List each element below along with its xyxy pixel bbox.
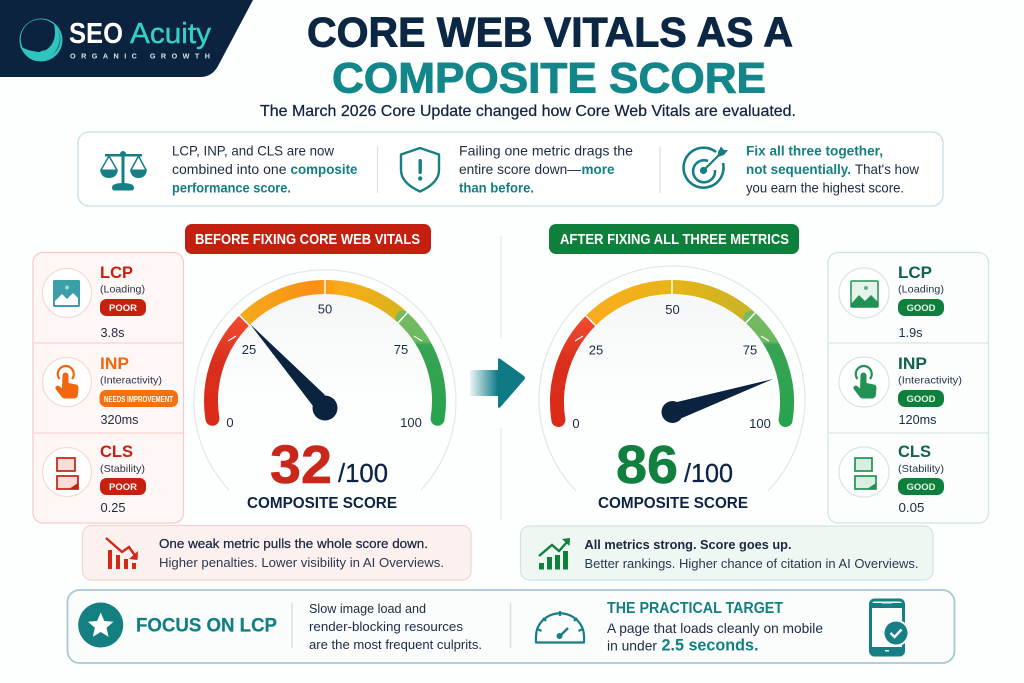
metric: CLS good: CLS (898, 443, 931, 461)
focus text: render-blocking resources (309, 619, 463, 634)
focus text: Slow image load and (309, 601, 426, 616)
callout: after: Better rankings. Higher chance of citation in AI Overviews. (584, 556, 918, 571)
target text: in under (607, 638, 657, 654)
text: failing one metric: more (582, 161, 615, 177)
icon: balance scales (100, 151, 147, 190)
callout: before: Higher penalties. Lower visibility in AI Overviews. (159, 555, 444, 570)
text: failing one metric: entire score down— (459, 161, 581, 177)
logo wordmark accent: Acuity (130, 18, 211, 50)
logo banner (0, 0, 253, 77)
callout: before (82, 526, 471, 580)
metric: INP good (839, 355, 962, 427)
metric: CLS poor: (Stability) (100, 463, 145, 475)
metric: LCP good: GOOD (906, 303, 936, 314)
text: fix all three: not sequentially. (746, 161, 851, 177)
gauge labels: 0 (572, 416, 580, 431)
gauge labels: 75 (394, 342, 408, 357)
metric: LCP poor: 3.8s (100, 326, 124, 340)
heading: after (549, 224, 799, 254)
text: fix all three: you earn the highest score. (746, 180, 904, 196)
text: failing one metric: Failing one metric drags the (459, 142, 633, 158)
panel: bottom tips (68, 590, 954, 663)
icon: image (53, 280, 80, 307)
gauge labels: 50 (318, 302, 332, 316)
panel: before metrics (33, 252, 184, 523)
icon: rising chart (539, 538, 570, 570)
text: failing one metric: than before. (459, 180, 534, 196)
panel: key takeaways (78, 132, 943, 206)
needle (662, 379, 773, 423)
icon: warning shield (401, 148, 439, 192)
metric: INP good: (Interactivity) (898, 374, 962, 386)
metric: INP needs improvement: 320ms (100, 413, 138, 427)
target text: 2.5 seconds. (662, 636, 758, 654)
gauge labels: 25 (589, 342, 603, 358)
icon: target (684, 146, 728, 188)
callout: before: One weak metric pulls the whole score down. (159, 536, 428, 551)
gauge labels: 75 (743, 342, 757, 358)
panel: after metrics (828, 252, 988, 523)
focus text: are the most frequent culprits. (309, 637, 482, 652)
score: COMPOSITE SCORE (247, 495, 397, 512)
focus heading: FOCUS ON LCP (136, 614, 277, 636)
score: 86 (616, 435, 678, 495)
score: /100 (684, 458, 733, 488)
gauge: before (194, 270, 456, 512)
icon: star badge (78, 602, 123, 648)
metric: CLS good: 0.05 (898, 501, 925, 515)
text: combined score (172, 142, 358, 196)
gauge labels: 100 (400, 415, 422, 430)
gauge labels: 25 (242, 342, 256, 357)
heading: after: AFTER FIXING ALL THREE METRICS (560, 232, 789, 248)
metric: LCP poor: (Loading) (100, 284, 145, 296)
focus text (309, 601, 482, 652)
score: COMPOSITE SCORE (598, 495, 748, 512)
metric: CLS good (839, 443, 944, 515)
target text (607, 620, 823, 654)
text: failing one metric (459, 142, 633, 196)
text: combined score: LCP, INP, and CLS are now (172, 142, 335, 158)
icon: image (851, 281, 878, 307)
gauge labels: 50 (665, 302, 680, 317)
metric: CLS poor: 0.25 (100, 501, 126, 515)
text: fix all three (746, 142, 920, 196)
icon: layout shift (855, 458, 876, 489)
gauge labels (226, 302, 422, 430)
metric: INP needs improvement: NEEDS IMPROVEMENT (104, 395, 173, 404)
metric: CLS poor: POOR (109, 482, 137, 493)
heading: before: BEFORE FIXING CORE WEB VITALS (195, 232, 420, 248)
logo tagline: ORGANIC GROWTH (70, 52, 210, 60)
heading: before (185, 224, 431, 254)
metric: INP good: INP (898, 355, 927, 373)
text: combined score: combined into one (172, 161, 287, 177)
metric: INP needs improvement: INP (100, 355, 129, 373)
metric: LCP good: 1.9s (898, 326, 922, 340)
target text: A page that loads cleanly on mobile (607, 620, 823, 636)
title: CORE WEB VITALS AS A (307, 8, 793, 56)
subtitle: The March 2026 Core Update changed how Core Web Vitals are evaluated. (260, 103, 796, 120)
metric: CLS good: GOOD (906, 482, 936, 493)
icon: logo ring (20, 18, 62, 62)
title (307, 8, 793, 102)
metric: INP good: GOOD (906, 394, 936, 405)
metric: INP needs improvement: (Interactivity) (100, 374, 162, 386)
target heading: THE PRACTICAL TARGET (607, 600, 783, 617)
icon: speedometer (536, 611, 584, 642)
text: fix all three: Fix all three together, (746, 142, 883, 158)
score (598, 435, 748, 512)
metric: LCP poor (42, 264, 146, 340)
callout: after: All metrics strong. Score goes up. (584, 537, 792, 552)
logo wordmark: SEO (69, 18, 123, 50)
gauge: after (539, 266, 805, 512)
arrow (470, 358, 525, 408)
metric: CLS poor: CLS (100, 443, 133, 461)
gauge arcs (211, 280, 439, 419)
gauge labels: 100 (749, 416, 771, 431)
score (247, 435, 397, 512)
gauge arcs (557, 280, 787, 420)
metric: LCP poor: POOR (109, 303, 137, 314)
icon: tap hand (55, 366, 78, 398)
section divider (500, 236, 502, 520)
score: /100 (338, 458, 388, 488)
icon: declining chart (106, 538, 138, 569)
metric: LCP good (839, 264, 944, 340)
title: COMPOSITE SCORE (332, 54, 766, 102)
icon: phone with check (870, 600, 910, 655)
icon: layout shift (57, 458, 78, 489)
metric: LCP good: (Loading) (898, 284, 944, 296)
metric: LCP poor: LCP (100, 264, 133, 282)
metric: CLS good: (Stability) (898, 463, 944, 475)
metric: CLS poor (42, 443, 146, 515)
text: combined score: performance score. (172, 180, 291, 196)
icon: tap hand (853, 366, 876, 398)
gauge labels (572, 302, 771, 431)
score: 32 (270, 435, 332, 495)
callout: after (520, 526, 933, 580)
metric: INP needs improvement (42, 355, 178, 427)
text: combined score: composite (290, 161, 358, 177)
gauge labels: 0 (226, 415, 234, 430)
metric: INP good: 120ms (898, 413, 936, 427)
metric: LCP good: LCP (898, 264, 932, 282)
needle (250, 324, 338, 420)
text: fix all three: That's how (855, 161, 920, 177)
